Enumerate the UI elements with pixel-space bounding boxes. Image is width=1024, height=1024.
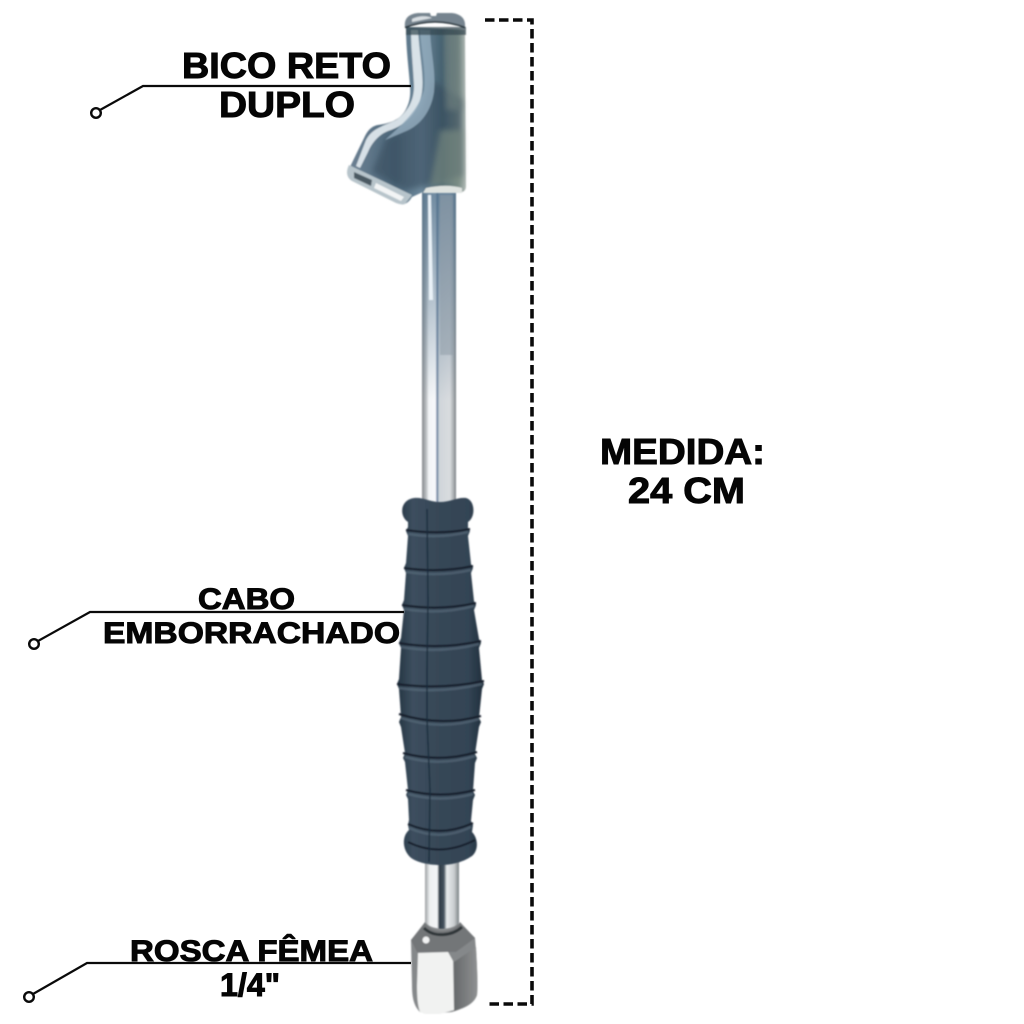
leader dot	[24, 992, 34, 1002]
label: emborrachado: EMBORRACHADO	[103, 617, 400, 650]
callout: bico reto duplo	[91, 45, 411, 118]
label: duplo: DUPLO	[219, 84, 355, 125]
label: ROSCA FÊMEA	[130, 934, 373, 968]
product: air chuck head	[347, 13, 466, 204]
nozzle rim	[347, 165, 412, 204]
top cap	[405, 13, 465, 27]
handle seam	[427, 509, 430, 862]
leader dot	[91, 108, 101, 118]
leader dot	[29, 639, 39, 649]
callout: cabo emborrachado	[29, 583, 404, 649]
measurement label	[600, 431, 765, 511]
label: CABO	[198, 583, 295, 616]
leader line	[33, 963, 411, 994]
product: metal tube upper	[422, 190, 456, 505]
dimension bracket: dashed line	[485, 20, 532, 1004]
product: lower tube	[425, 860, 459, 930]
handle rib highlights	[399, 532, 482, 835]
leader line	[100, 86, 411, 110]
callout: rosca femea	[24, 934, 411, 1002]
handle ribs	[397, 529, 484, 850]
product: rubber handle	[397, 498, 484, 865]
product: hex nut	[411, 922, 477, 1014]
measurement label: 24 CM	[628, 470, 745, 511]
leader line	[38, 612, 404, 641]
label: thread size: 1/4"	[220, 967, 280, 1003]
measurement label: MEDIDA:	[600, 431, 765, 472]
head shading	[356, 27, 466, 190]
label: BICO RETO	[182, 45, 391, 86]
